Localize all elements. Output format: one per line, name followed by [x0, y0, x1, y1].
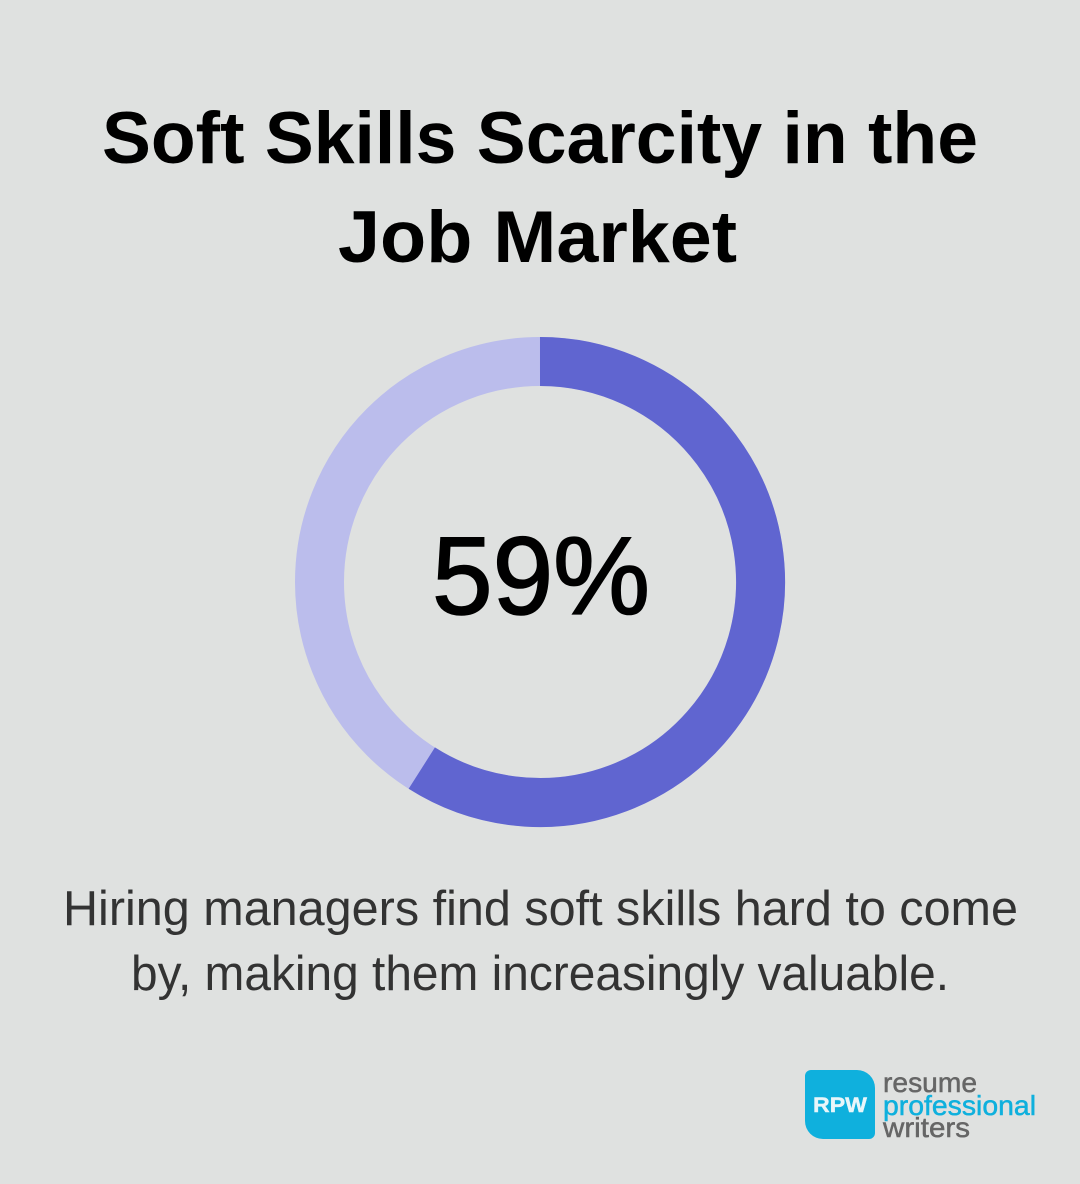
title [102, 98, 978, 278]
logo initials: RPW [813, 1094, 867, 1117]
donut chart: 59% [320, 362, 761, 802]
center value: 59% [432, 515, 650, 638]
logo wordmark: professional [883, 1090, 1036, 1121]
description text: Hiring managers find soft skills hard to come [63, 882, 1018, 936]
description text [63, 882, 1018, 1001]
logo: resume professional writers [805, 1067, 1036, 1143]
logo wordmark [882, 1067, 1036, 1143]
title: Soft Skills Scarcity in the [102, 98, 978, 179]
logo wordmark: writers [882, 1112, 970, 1143]
logo badge [805, 1070, 875, 1139]
logo wordmark: resume [883, 1067, 977, 1098]
description text: by, making them increasingly valuable. [131, 947, 949, 1001]
title: Job Market [338, 197, 737, 278]
